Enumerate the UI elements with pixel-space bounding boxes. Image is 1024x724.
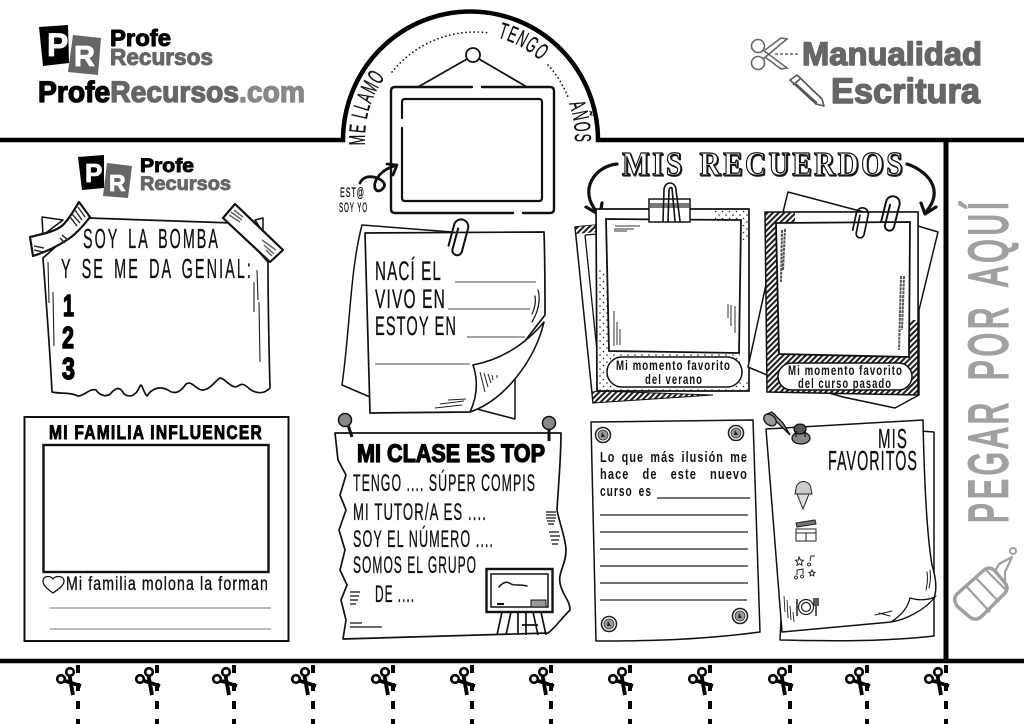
back sheets <box>575 225 597 403</box>
panel: soy la bomba torn note: 1 <box>63 288 74 323</box>
note: this is me with arrow <box>339 164 397 215</box>
logo: ProfeRecursos inner: Profe <box>140 156 194 177</box>
panel: mi familia influencer <box>24 417 288 641</box>
category label: Manualidad Escritura: Escritura <box>831 72 981 111</box>
panel: lo que mas ilusion: curso es <box>600 483 652 500</box>
panel: soy la bomba torn note: Y SE ME DA GENIAL: <box>61 253 253 284</box>
panel: mi clase es top: SOY EL NÚMERO .... <box>353 526 494 553</box>
back sheet <box>342 225 515 419</box>
curled corner <box>891 597 935 622</box>
tape: right <box>223 204 283 262</box>
arch labels: TENGO <box>500 22 548 58</box>
panel: mis favoritos: FAVORITOS <box>828 445 918 476</box>
icon: heart <box>43 577 64 593</box>
polaroid: last school year memory: Mi momento favorito <box>788 362 903 378</box>
category label: Manualidad Escritura <box>752 36 982 111</box>
icon: pencil <box>790 75 824 106</box>
logo: ProfeRecursos inner <box>78 155 231 198</box>
panel: mis favoritos: MIS <box>878 423 908 454</box>
arrow: left <box>586 164 617 215</box>
title: mis recuerdos <box>586 146 936 215</box>
polaroid: last school year memory: del curso pasado <box>798 375 892 391</box>
note: this is me with arrow: EST@ <box>340 184 365 200</box>
arrow: right <box>907 164 936 214</box>
panel: naci el curled note: NACÍ EL <box>375 256 442 286</box>
push pins <box>761 412 810 444</box>
panel: lo que mas ilusion <box>591 420 760 641</box>
title: mis recuerdos: MIS RECUERDOS <box>622 146 905 183</box>
polaroid: summer memory: Mi momento favorito <box>616 357 731 373</box>
icon: glue bottle <box>955 548 1016 619</box>
panel: soy la bomba torn note <box>30 202 283 396</box>
panel: mi clase es top <box>335 414 570 639</box>
panel: soy la bomba torn note: SOY LA BOMBA <box>83 223 220 254</box>
logo: ProfeRecursos inner: R <box>109 170 126 196</box>
panel: lo que mas ilusion: hace de este nuevo <box>600 466 748 483</box>
logo: ProfeRecursos inner: P <box>85 158 102 188</box>
arch labels <box>348 22 594 144</box>
pin: left <box>338 414 352 437</box>
panel: mi clase es top: SOMOS EL GRUPO <box>353 552 477 579</box>
back sheets <box>748 192 938 408</box>
panel: mi familia influencer: MI FAMILIA INFLUENCER <box>49 423 263 444</box>
panel: mi clase es top: MI TUTOR/A ES .... <box>353 499 487 526</box>
icon: plate and cutlery <box>784 596 818 622</box>
panel: mi clase es top: MI CLASE ES TOP <box>357 440 545 468</box>
logo: ProfeRecursos header: Profe <box>110 25 171 51</box>
panel: mi clase es top: DE .... <box>375 581 415 608</box>
polaroid: summer memory: del verano <box>645 371 703 387</box>
panel: mi familia influencer: Mi familia molona la forman <box>66 574 269 595</box>
logo: ProfeRecursos header <box>38 25 305 109</box>
panel: mis favoritos <box>761 412 936 641</box>
logo: ProfeRecursos header: R <box>74 41 95 73</box>
pin: right <box>542 416 556 441</box>
panel: naci el curled note <box>342 218 545 419</box>
cut guides: scissors and dashed lines <box>57 665 949 724</box>
category label: Manualidad Escritura: Manualidad <box>802 36 982 72</box>
polaroid: last school year memory <box>748 192 938 408</box>
logo: ProfeRecursos header: ProfeRecursos.com <box>38 76 305 109</box>
icon: chalkboard on easel <box>486 569 552 635</box>
panel: naci el curled note: VIVO EN <box>375 284 446 314</box>
icon: scissors <box>752 38 799 70</box>
binder clip <box>649 183 690 222</box>
arch labels: ME LLAMO <box>348 70 383 144</box>
curled corner <box>470 322 544 412</box>
tape: left <box>30 202 90 256</box>
logo: ProfeRecursos header: Recursos <box>110 44 213 70</box>
logo: ProfeRecursos inner: Recursos <box>140 174 231 195</box>
polaroid: summer memory <box>575 183 749 403</box>
note: this is me with arrow: SOY YO <box>339 199 368 215</box>
panel: naci el curled note: ESTOY EN <box>375 311 457 341</box>
paperclips <box>851 195 901 239</box>
icon: music and stars <box>795 556 815 579</box>
icon: ice cream <box>795 482 812 509</box>
hanging portrait frame <box>391 48 554 213</box>
panel: lo que mas ilusion: Lo que más ilusión me <box>600 449 748 466</box>
panel: soy la bomba torn note: 3 <box>62 351 75 386</box>
bolts <box>596 426 748 632</box>
arch labels: AÑOS <box>568 102 594 142</box>
panel: mi clase es top: TENGO .... SÚPER COMPIS <box>353 470 536 497</box>
panel: soy la bomba torn note: 2 <box>62 320 74 355</box>
logo: ProfeRecursos header: P <box>47 27 68 63</box>
icon: clapperboard <box>796 520 816 541</box>
